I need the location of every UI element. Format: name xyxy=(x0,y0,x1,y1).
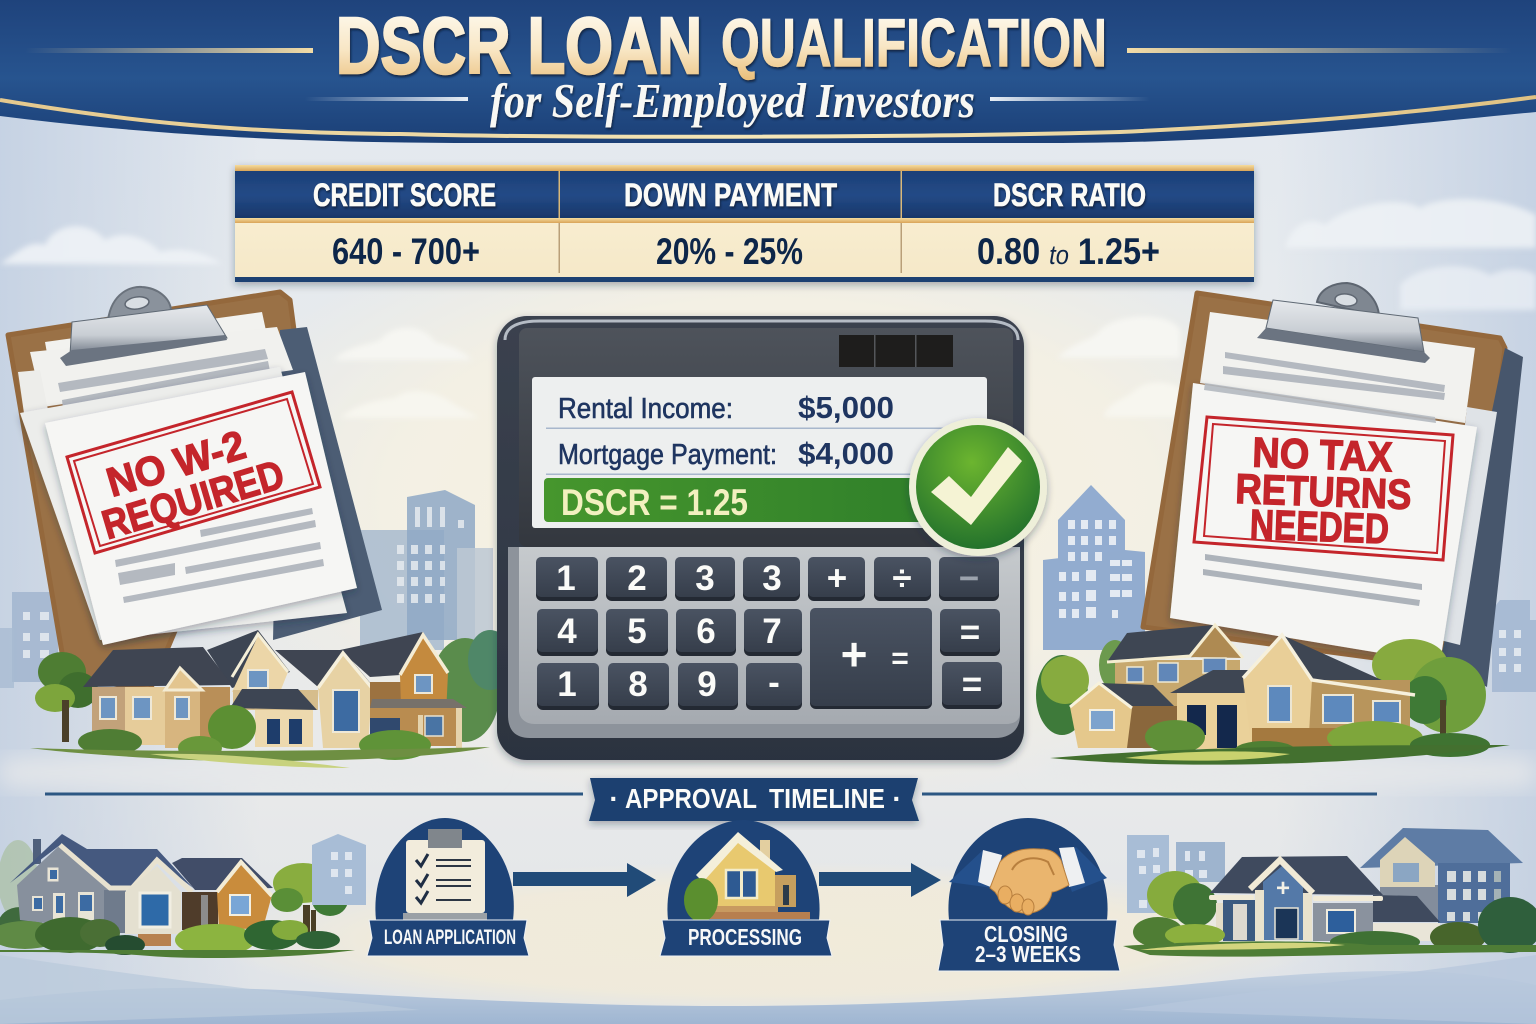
label: LOAN APPLICATION xyxy=(384,926,516,949)
label xyxy=(660,920,832,956)
result bar: DSCR = 1.25 xyxy=(561,482,748,523)
label: CLOSING xyxy=(984,921,1068,947)
display: Rental Income: xyxy=(558,393,733,425)
column: dscr ratio: 0.80 to 1.25+ xyxy=(977,231,1160,272)
stamp: no tax returns needed: NO TAX xyxy=(1252,429,1393,480)
solar panel xyxy=(839,335,953,367)
trees behind left houses xyxy=(35,630,512,742)
label xyxy=(367,920,529,956)
column: down payment xyxy=(624,177,837,272)
display: Mortgage Payment: xyxy=(558,439,777,471)
subtitle: for Self-Employed Investors xyxy=(490,73,975,128)
clip xyxy=(60,287,227,366)
step: closing xyxy=(938,818,1120,971)
keys: - xyxy=(768,663,780,702)
arrow: application to processing xyxy=(513,863,656,897)
keys: ÷ xyxy=(892,559,912,598)
keys: = xyxy=(960,613,980,652)
skyline: left xyxy=(0,490,493,688)
stamp: no tax returns needed: NEEDED xyxy=(1249,501,1390,552)
title xyxy=(336,1,1107,90)
section rule xyxy=(45,792,1377,796)
right clipboard xyxy=(1143,283,1523,687)
keys: + xyxy=(841,628,867,680)
keys: 6 xyxy=(696,612,716,651)
label: PROCESSING xyxy=(688,924,802,950)
column: credit score xyxy=(313,177,496,272)
keys: 7 xyxy=(762,612,782,651)
title: QUALIFICATION xyxy=(721,5,1107,81)
stamp: no tax returns needed: RETURNS xyxy=(1235,465,1412,518)
approval timeline heading: APPROVAL xyxy=(625,783,757,814)
keypad deck xyxy=(508,547,1020,738)
houses: left group xyxy=(30,630,490,768)
keys: 9 xyxy=(697,665,717,704)
approval timeline heading xyxy=(589,778,919,821)
icon: house xyxy=(684,832,810,922)
stamp: no tax returns needed xyxy=(1194,417,1453,560)
keys: 3 xyxy=(762,559,782,598)
keys: + xyxy=(827,559,847,598)
keys: 8 xyxy=(628,665,648,704)
tree xyxy=(271,863,348,933)
column: down payment: DOWN PAYMENT xyxy=(624,177,837,213)
column: dscr ratio: DSCR RATIO xyxy=(993,177,1146,213)
keys: − xyxy=(959,559,979,598)
requirements table xyxy=(235,165,1254,282)
approval timeline heading: · xyxy=(892,783,902,814)
skyline: right xyxy=(1043,485,1536,692)
bottom scene: mid skylines xyxy=(312,834,1225,913)
check badge xyxy=(909,418,1047,556)
stamp: no w-2 required: NO W-2 xyxy=(101,421,251,506)
display: $5,000 xyxy=(798,390,894,425)
left clipboard xyxy=(8,287,382,690)
clip xyxy=(1257,283,1430,363)
bottom scene: left houses xyxy=(0,834,355,958)
houses: right group xyxy=(1050,625,1510,765)
trees behind right houses xyxy=(1036,639,1486,745)
keys: 4 xyxy=(557,612,577,651)
column: dscr ratio xyxy=(977,177,1160,272)
result bar xyxy=(544,478,944,523)
keys: 1 xyxy=(556,559,576,598)
icon: handshake xyxy=(949,847,1107,915)
title: DSCR LOAN xyxy=(336,1,702,90)
column: down payment: 20% - 25% xyxy=(656,231,803,272)
keys: 3 xyxy=(695,559,715,598)
calculator xyxy=(497,316,1047,760)
keys: 5 xyxy=(627,612,647,651)
keys: = xyxy=(891,642,909,675)
clouds xyxy=(0,199,1536,418)
approval timeline heading: · xyxy=(609,783,619,814)
label xyxy=(938,920,1120,971)
stamp: no w-2 required xyxy=(67,392,320,553)
step: processing xyxy=(660,820,832,956)
column: credit score: CREDIT SCORE xyxy=(313,177,496,213)
step: loan application xyxy=(367,818,529,956)
header banner xyxy=(0,0,1536,143)
display xyxy=(532,377,987,528)
keys: 1 xyxy=(557,665,577,704)
label: 2–3 WEEKS xyxy=(975,941,1081,967)
column: credit score: 640 - 700+ xyxy=(332,231,480,272)
icon: clipboard checklist xyxy=(403,829,487,920)
bottom scene: right houses xyxy=(1123,828,1536,957)
display: $4,000 xyxy=(798,436,894,471)
bottom scene: right houses: + xyxy=(1276,875,1290,902)
stamp: no w-2 required: REQUIRED xyxy=(97,451,289,548)
keys xyxy=(536,557,1002,710)
keys: = xyxy=(962,665,982,704)
keys: 2 xyxy=(627,559,647,598)
approval timeline heading: TIMELINE xyxy=(769,783,885,814)
arrow: processing to closing xyxy=(819,863,941,897)
